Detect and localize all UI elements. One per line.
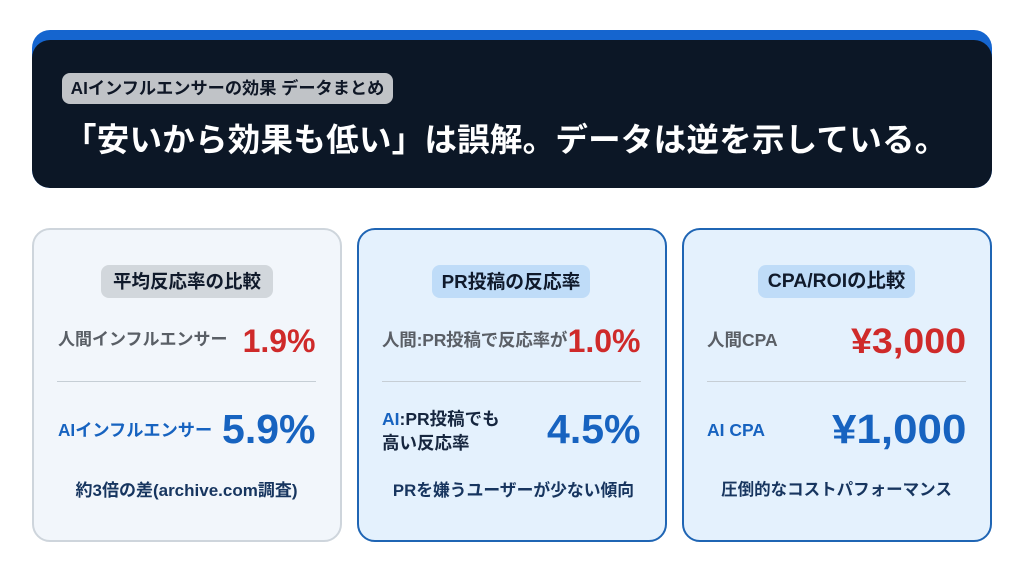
AI label: 高い反応率 [382, 433, 470, 453]
panel: average response rate [32, 228, 342, 542]
AI label: AI:PR投稿でも [382, 409, 500, 429]
AI value: ¥1,000 [832, 406, 966, 452]
panel heading: CPA/ROIの比較 [768, 270, 905, 292]
header banner [32, 30, 992, 188]
AI value: 4.5% [547, 406, 640, 452]
AI label: AI CPA [707, 420, 765, 440]
panel: PR post response rate [357, 228, 667, 542]
panel heading [758, 265, 915, 298]
AI value: 5.9% [222, 406, 316, 452]
main title: 「安いから効果も低い」は誤解。データは逆を示している。 [64, 122, 948, 158]
human label: 人間CPA [707, 330, 778, 350]
human value: ¥3,000 [851, 322, 966, 361]
panel: CPA/ROI comparison [682, 228, 992, 542]
human label: 人間インフルエンサー [58, 330, 228, 349]
AI label: AIインフルエンサー [58, 420, 212, 440]
panel heading [101, 265, 273, 298]
header dark panel [32, 40, 992, 188]
panel heading [432, 265, 590, 298]
panel heading: PR投稿の反応率 [442, 271, 580, 292]
human value: 1.9% [243, 323, 316, 359]
panel note: 圧倒的なコストパフォーマンス [721, 481, 952, 499]
header tag [62, 73, 393, 104]
panel note: PRを嫌うユーザーが少ない傾向 [393, 481, 634, 500]
human value: 1.0% [568, 323, 640, 359]
panel heading: 平均反応率の比較 [113, 271, 261, 292]
panel note: 約3倍の差(archive.com調査) [76, 481, 298, 500]
human label: 人間:PR投稿で反応率が [382, 330, 567, 350]
AI label [382, 409, 500, 453]
header tag: AIインフルエンサーの効果 データまとめ [71, 78, 384, 98]
